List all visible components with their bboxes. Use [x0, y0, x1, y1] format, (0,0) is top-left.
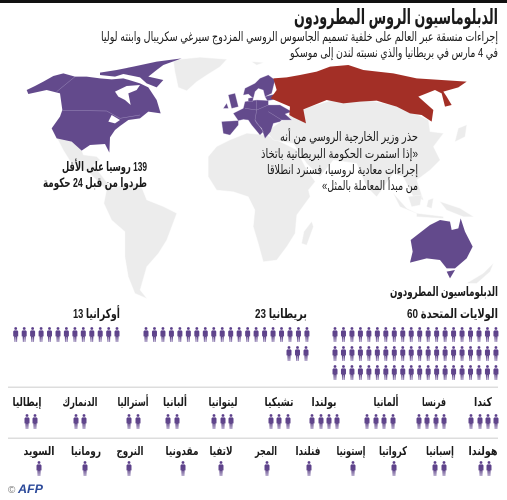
callout: totals: 139 روسيا على الأقل	[62, 158, 147, 174]
row 1 labels: تشيكيا	[264, 395, 294, 409]
row 2 labels: رومانيا	[71, 444, 101, 459]
map: grey land	[57, 57, 493, 298]
map: Russia red	[271, 65, 467, 123]
row 2 labels: المجر	[254, 444, 277, 458]
callout: quote: حذر وزير الخارجية الروسي من أنه	[280, 128, 418, 145]
row 1 labels: ألبانيا	[163, 394, 187, 409]
country: Britain: بريطانيا 23	[255, 306, 307, 321]
row 1 labels: كندا	[474, 395, 492, 409]
row 2 labels: إسبانيا	[426, 444, 454, 458]
row 2 labels: هولندا	[468, 444, 498, 459]
row 2 labels: لاتفيا	[210, 444, 232, 458]
row 1 people	[24, 414, 498, 429]
row 1 labels: أستراليا	[118, 394, 148, 409]
map: North America purple	[15, 58, 182, 153]
callout: totals	[43, 158, 147, 190]
row 1 labels: فرنسا	[422, 395, 446, 409]
row 1 labels: ألمانيا	[374, 394, 398, 409]
callout: quote: «إذا استمرت الحكومة البريطانية باتخاذ	[261, 146, 418, 162]
map: Europe purple	[222, 75, 292, 138]
country: United States	[332, 306, 498, 380]
top black bar	[0, 0, 507, 3]
subtitle	[101, 29, 498, 61]
row 2 labels: النروج	[116, 444, 144, 459]
row 1 labels: ليتوانيا	[208, 395, 238, 410]
row 2 labels: مقدونيا	[166, 444, 198, 459]
row 2 labels	[24, 444, 498, 459]
country: Britain	[144, 306, 309, 361]
row 2 people	[36, 461, 492, 476]
row 2 labels: كرواتيا	[379, 444, 407, 459]
credit: AFP logo: ©	[8, 485, 16, 496]
callout: totals: طردوا من قبل 24 حكومة	[43, 175, 147, 190]
credit: AFP logo: AFP	[17, 484, 43, 496]
row 2 labels: السويد	[24, 444, 54, 459]
row 2 labels: فنلندا	[296, 444, 320, 458]
callout: quote	[261, 128, 418, 194]
row 1 labels: الدنمارك	[62, 395, 98, 409]
country: Ukraine	[13, 305, 120, 342]
row 1 labels	[12, 394, 492, 410]
credit: AFP logo	[8, 484, 43, 496]
callout: quote: إجراءات معادية لروسيا، فسنرد انطلاقا	[267, 162, 418, 178]
callout: quote: من مبدأ المعاملة بالمثل»	[322, 177, 418, 194]
row 2 labels: إستونيا	[336, 444, 366, 459]
row 1 labels: بولندا	[312, 395, 336, 410]
country: Ukraine: أوكرانيا 13	[73, 305, 120, 321]
world map	[15, 57, 493, 298]
map: Australia purple	[410, 218, 473, 278]
row 1 labels: إيطاليا	[12, 395, 42, 409]
